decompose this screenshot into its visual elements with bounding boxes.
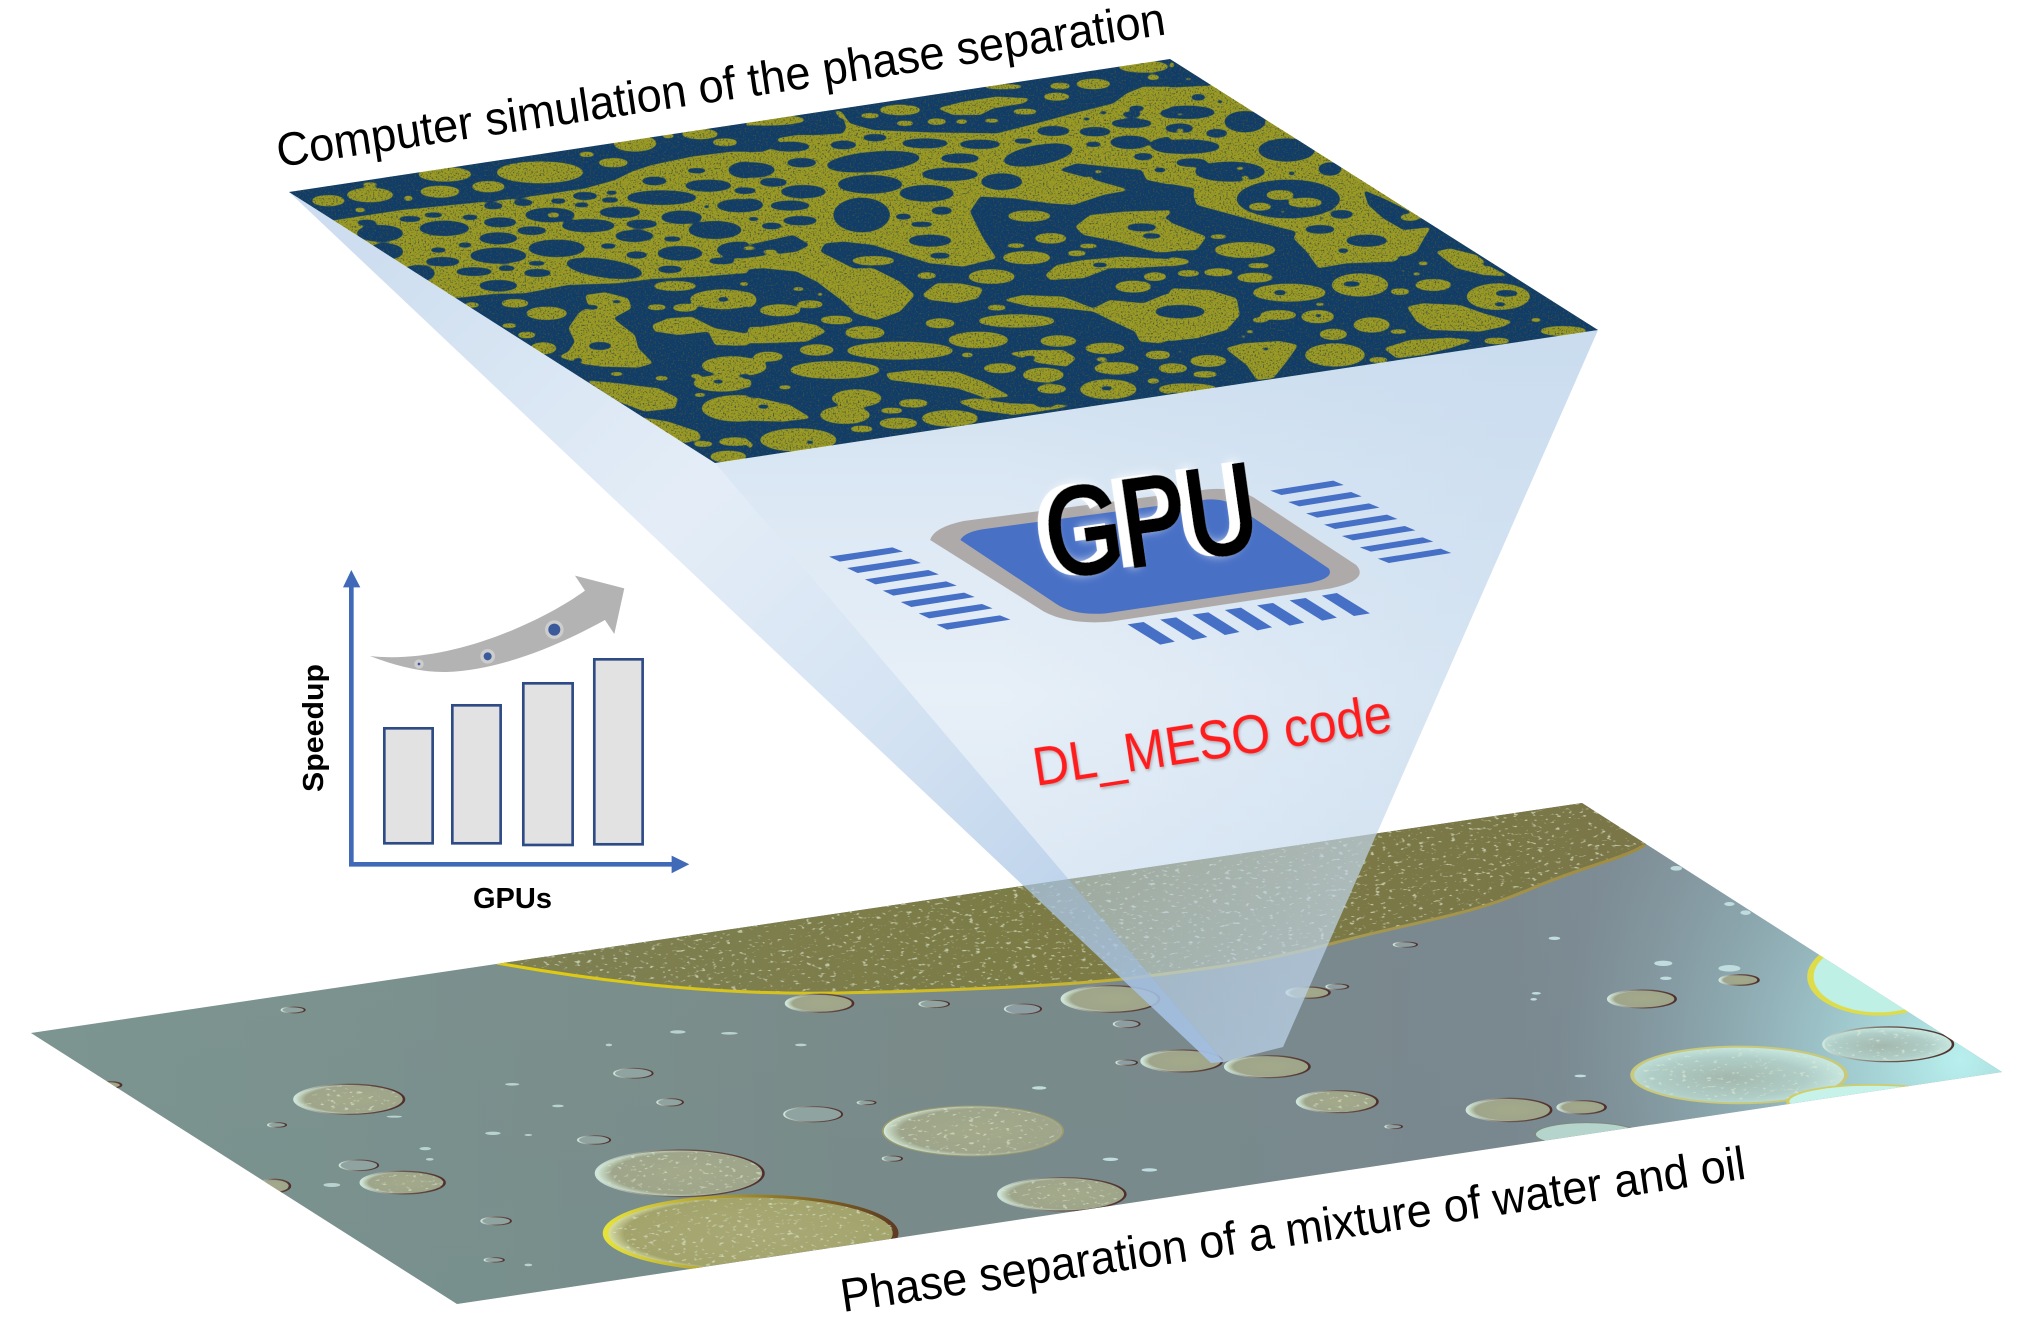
trend arrow bbox=[370, 576, 624, 672]
bubbles right half bbox=[998, 866, 1956, 1211]
chip left pins bbox=[829, 547, 1010, 630]
chart axes bbox=[343, 570, 689, 873]
y axis label: Speedup bbox=[298, 664, 330, 792]
bar chart: speedup vs GPUs bbox=[298, 570, 689, 915]
x axis label: GPUs bbox=[473, 883, 552, 915]
title: phase separation of water and oil: Phase separation of a mixture of water and oil bbox=[837, 1136, 1749, 1320]
icon: GPU chip bbox=[829, 437, 1451, 645]
chip outer package bbox=[930, 489, 1360, 622]
trend dots bbox=[414, 620, 564, 669]
inner specks of the larger bubbles bbox=[302, 1028, 1942, 1266]
chip blue die bbox=[960, 499, 1330, 614]
bubbles left half bbox=[98, 994, 1063, 1271]
large oil droplet at top of plate bbox=[496, 803, 1646, 995]
funnel: left face bbox=[289, 192, 1224, 1063]
label: DL_MESO code: DL_MESO code bbox=[1028, 682, 1396, 798]
chip right pins bbox=[1270, 481, 1451, 563]
panel: oil and water photo plate bbox=[0, 780, 2026, 1320]
GPU label: GPU bbox=[1036, 437, 1266, 604]
chip bottom pins bbox=[1128, 593, 1370, 645]
chart bars bbox=[384, 659, 643, 845]
panel: computer simulation pattern bbox=[289, 59, 1598, 463]
funnel: front face bbox=[715, 330, 1598, 1062]
